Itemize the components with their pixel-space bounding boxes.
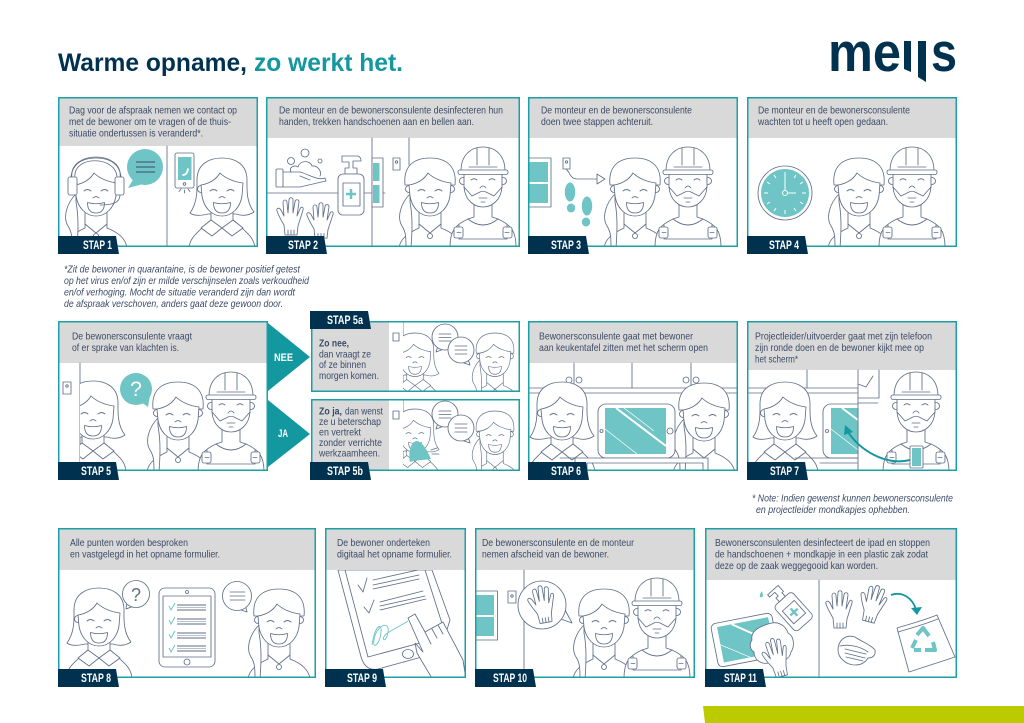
illustration stap 1 <box>65 146 255 248</box>
caption stap 3: doen twee stappen achteruit. <box>541 116 653 128</box>
logo: mells: me <box>828 21 901 83</box>
caption stap 6: Bewonersconsulente gaat met bewoner <box>539 330 693 342</box>
tab stap 1: STAP 1 <box>83 240 112 252</box>
tab stap 5 <box>58 462 119 480</box>
caption stap 10: De bewonersconsulente en de monteur <box>482 537 634 549</box>
arrow: nee: NEE <box>274 352 293 364</box>
tab stap 8 <box>58 669 119 687</box>
tab stap 10 <box>475 669 536 687</box>
panel: stap 2 <box>266 97 520 254</box>
caption stap 5 <box>72 330 192 354</box>
panel: stap 6 <box>528 321 738 480</box>
title <box>58 49 403 77</box>
illustration stap 9 <box>338 570 466 680</box>
illustration stap 7 <box>747 370 956 472</box>
panel: stap 10 <box>470 528 695 687</box>
caption stap 1 <box>69 104 237 140</box>
tab stap 8: STAP 8 <box>81 673 111 685</box>
note mondkapjes: en projectleider mondkapjes ophebben. <box>756 504 910 516</box>
illustration stap 5: ? <box>130 378 142 401</box>
illustration stap 11 <box>710 580 955 680</box>
panel border <box>267 98 519 246</box>
title: zo werkt het. <box>254 49 403 77</box>
illustration stap 6 <box>528 363 738 473</box>
panel: stap 11 <box>705 528 957 687</box>
arrow: ja: JA <box>278 428 288 440</box>
caption stap 5b <box>318 406 383 460</box>
panel border <box>312 400 519 470</box>
caption stap 10 <box>482 537 634 560</box>
caption stap 5b: werkzaamheen. <box>318 448 380 460</box>
illustration stap 8: ? <box>131 585 141 605</box>
caption stap 5: of er sprake van klachten is. <box>72 342 179 354</box>
caption stap 1: met de bewoner om te vragen of de thuis- <box>69 116 231 128</box>
panel border <box>59 98 257 246</box>
tab stap 9 <box>325 669 386 687</box>
footnote quarantaine: de afspraak verschoven, anders gaat deze gewoon door. <box>64 298 283 310</box>
panel border <box>476 529 694 677</box>
arrow: nee <box>268 323 310 391</box>
panel: stap 5 <box>58 321 268 480</box>
caption stap 8: en vastgelegd in het opname formulier. <box>70 548 220 560</box>
caption stap 11: deze op de zaak weggegooid kan worden. <box>715 560 878 572</box>
note mondkapjes: * Note: Indien gewenst kunnen bewonersconsulente <box>752 492 953 504</box>
caption stap 5a: dan vraagt ze <box>319 348 371 360</box>
panel border <box>529 322 737 470</box>
panel: stap 1 <box>58 97 258 254</box>
logo: mells: s <box>931 21 957 83</box>
green footer bar <box>703 706 1024 723</box>
panel: stap 5a <box>310 311 520 400</box>
caption stap 1: situatie ondertussen is veranderd*. <box>69 128 203 140</box>
illustration stap 5 <box>60 363 264 472</box>
tab stap 5b <box>310 462 371 480</box>
caption stap 11 <box>715 537 930 572</box>
tab stap 4 <box>747 236 808 254</box>
tab stap 5b: STAP 5b <box>327 466 363 478</box>
illustration stap 10 <box>470 570 690 679</box>
illustration stap 5a <box>403 322 514 390</box>
panel border <box>312 322 519 391</box>
tab stap 10: STAP 10 <box>493 673 527 685</box>
footnote quarantaine: op het virus en/of zijn er milde verschijnselen zoals verkoudheid <box>64 275 310 287</box>
caption stap 5a: morgen komen. <box>319 370 379 382</box>
illustration stap 3 <box>520 147 721 248</box>
panel: stap 4 <box>747 97 957 254</box>
panel border <box>706 529 956 677</box>
caption stap 5a <box>319 338 379 382</box>
tab stap 5a <box>310 311 371 329</box>
title: Warme opname, <box>58 49 247 77</box>
caption stap 2: De monteur en de bewonersconsulente desinfecteren hun <box>279 104 503 116</box>
panel: stap 8 <box>58 528 316 687</box>
caption stap 4: De monteur en de bewonersconsulente <box>758 104 910 116</box>
caption stap 2: handen, trekken handschoenen aan en bellen aan. <box>279 116 474 128</box>
caption stap 11: de handschoenen + mondkapje in een plastic zak zodat <box>715 548 928 560</box>
caption stap 1: Dag voor de afspraak nemen we contact op <box>69 104 237 116</box>
tab stap 2: STAP 2 <box>288 240 318 252</box>
footnote quarantaine: en/of verhoging. Mocht de situatie veranderd zijn dan wordt <box>64 286 296 298</box>
tab stap 6 <box>528 462 589 480</box>
tab stap 11 <box>705 669 766 687</box>
tab stap 4: STAP 4 <box>769 240 799 252</box>
tab stap 7 <box>747 462 808 480</box>
caption stap 5b: en vertrekt <box>319 426 361 438</box>
caption stap 8: Alle punten worden besproken <box>70 537 188 549</box>
caption stap 7: Projectleider/uitvoerder gaat met zijn telefoon <box>755 330 932 342</box>
caption stap 6 <box>539 330 708 354</box>
panel: stap 5b <box>310 399 520 480</box>
caption stap 2 <box>279 104 503 128</box>
caption stap 7: het scherm* <box>755 354 798 366</box>
tab stap 6: STAP 6 <box>551 466 581 478</box>
panel border <box>748 98 956 246</box>
tab stap 5a: STAP 5a <box>327 315 363 327</box>
caption stap 11: Bewonersconsulenten desinfecteert de ipad en stoppen <box>715 537 930 549</box>
panel: stap 3 <box>520 97 738 254</box>
caption stap 5b: zonder verrichte <box>319 437 382 449</box>
illustration stap 5b <box>403 400 514 470</box>
caption stap 7: zijn ronde doen en de bewoner kijkt mee op <box>755 342 924 354</box>
panel: stap 7 <box>747 321 957 480</box>
caption stap 7 <box>755 330 932 366</box>
panel border <box>59 529 315 677</box>
illustration stap 4 <box>758 147 945 248</box>
logo: mells <box>828 21 957 83</box>
arrow: ja <box>268 400 310 467</box>
caption stap 9: De bewoner onderteken <box>337 537 430 549</box>
tab stap 1 <box>58 236 119 254</box>
caption stap 3 <box>541 104 692 128</box>
illustration stap 8 <box>66 580 310 679</box>
doorbell stap 5b <box>393 411 399 419</box>
tab stap 2 <box>266 236 327 254</box>
caption stap 9: digitaal het opname formulier. <box>337 548 452 560</box>
panel border <box>748 322 956 470</box>
caption stap 3: De monteur en de bewonersconsulente <box>541 104 692 116</box>
panel border <box>59 322 267 470</box>
caption stap 5b: Zo ja, <box>319 406 342 418</box>
caption stap 5b: dan wenst <box>345 406 383 418</box>
caption stap 5b: ze u beterschap <box>319 416 381 428</box>
caption stap 5: De bewonersconsulente vraagt <box>72 330 192 342</box>
caption stap 8 <box>70 537 220 560</box>
tab stap 5: STAP 5 <box>81 466 111 478</box>
note mondkapjes <box>752 492 953 516</box>
tab stap 11: STAP 11 <box>724 673 757 685</box>
panel border <box>529 98 737 246</box>
footnote quarantaine <box>64 264 310 310</box>
tab stap 7: STAP 7 <box>770 466 799 478</box>
footnote quarantaine: *Zit de bewoner in quarantaine, is de bewoner positief getest <box>64 264 301 276</box>
panel: stap 9 <box>325 528 466 687</box>
tab stap 3: STAP 3 <box>551 240 581 252</box>
caption stap 4 <box>757 104 910 128</box>
tab stap 9: STAP 9 <box>347 673 377 685</box>
caption stap 10: nemen afscheid van de bewoner. <box>482 548 609 560</box>
caption stap 5a: of ze binnen <box>319 359 366 371</box>
caption stap 6: aan keukentafel zitten met het scherm open <box>539 342 708 354</box>
panel border <box>326 529 465 677</box>
illustration stap 2 <box>266 138 516 248</box>
caption stap 4: wachten tot u heeft open gedaan. <box>757 116 888 128</box>
caption stap 9 <box>337 537 452 560</box>
tab stap 3 <box>528 236 589 254</box>
caption stap 5a: Zo nee, <box>319 338 349 350</box>
doorbell stap 5a <box>393 333 399 341</box>
